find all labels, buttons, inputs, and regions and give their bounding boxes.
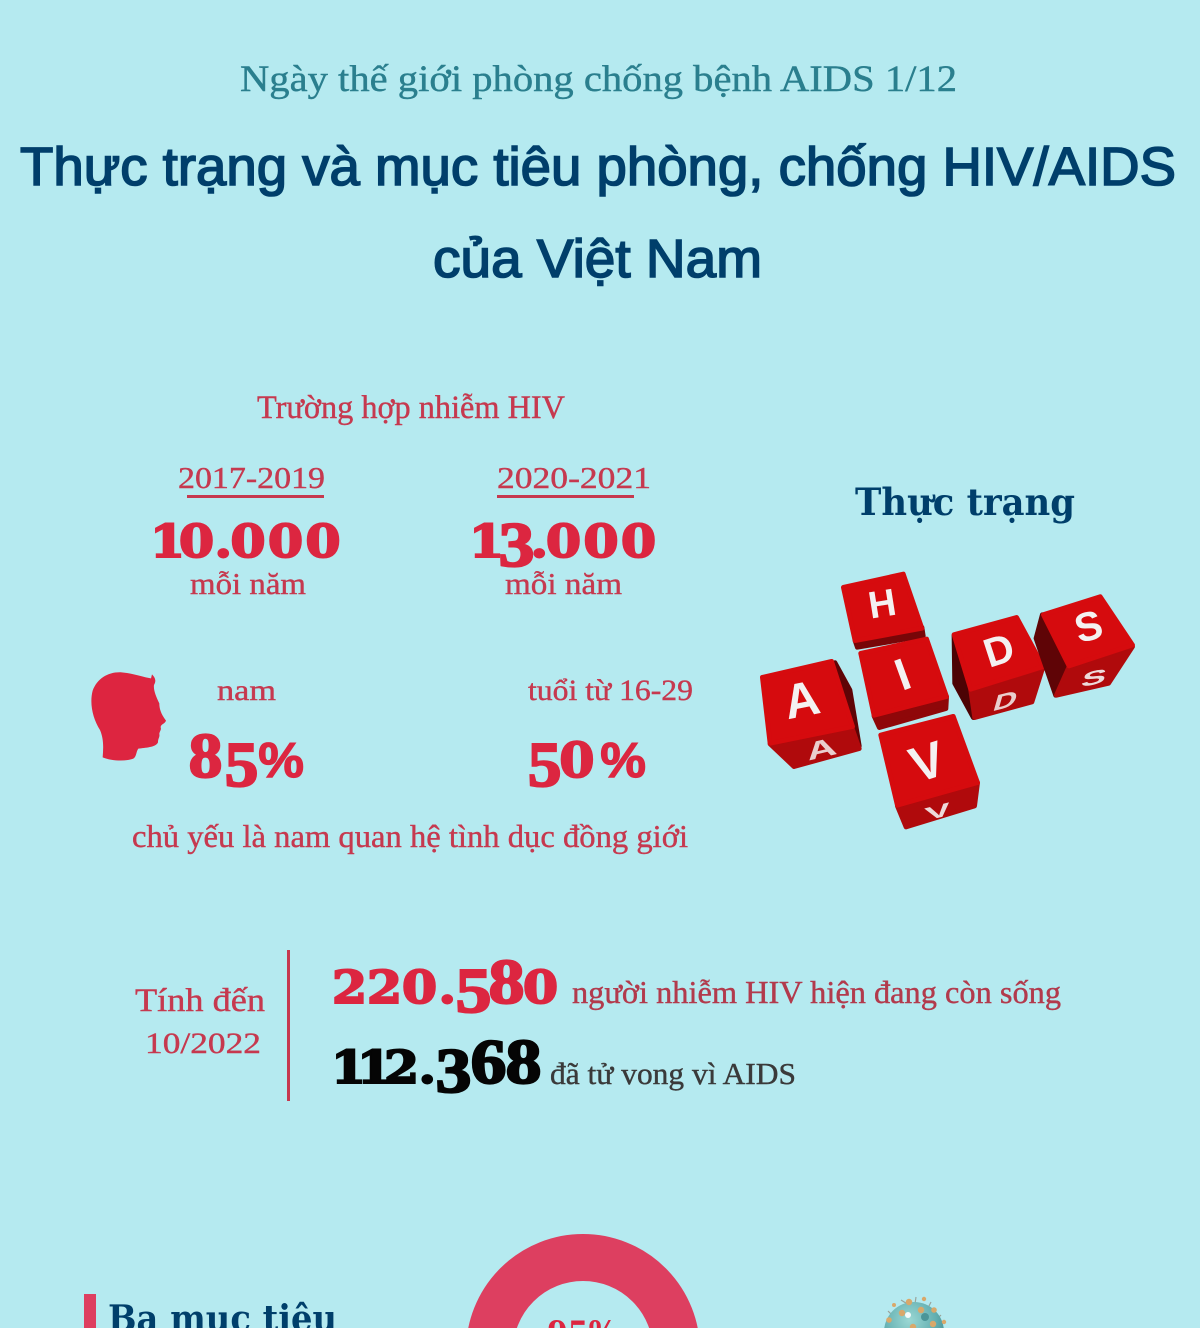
stat: 2017-2019: 1 <box>150 516 185 568</box>
stat: age 16-29 50%: tuổi từ 16-29 <box>528 674 693 707</box>
stat: AIDS deaths: đã tử vong vì AIDS <box>550 1056 796 1091</box>
stat: people living with HIV: . <box>438 962 456 1014</box>
cube I <box>861 639 947 728</box>
stat: people living with HIV: 5 <box>456 955 491 1026</box>
stat: male 85%: nam <box>217 674 276 707</box>
cube A: A <box>803 733 839 766</box>
title: của Việt Nam <box>433 229 762 289</box>
title: Thực trạng và mục tiêu phòng, chống HIV/AIDS <box>20 137 1176 197</box>
stat: age 16-29 50% <box>528 674 693 801</box>
cube H: H <box>865 582 899 628</box>
cube S <box>1036 597 1133 695</box>
stat: people living with HIV: 2 <box>367 962 402 1014</box>
stat: age 16-29 50%: % <box>600 733 646 788</box>
icon: male head silhouette <box>91 672 166 761</box>
heading: current situation: Thực trạng <box>855 480 1075 524</box>
cube H <box>843 574 923 647</box>
date label: Tính đến <box>135 983 265 1019</box>
cube V <box>881 716 978 827</box>
cube V: V <box>923 799 954 825</box>
stat: 2020-2021: 0 <box>583 516 619 568</box>
stat: people living with HIV: 0 <box>402 962 437 1014</box>
cube A: A <box>779 670 824 730</box>
stat: AIDS deaths: 2 <box>384 1042 419 1094</box>
stat: AIDS deaths: 1 <box>357 1042 392 1094</box>
title <box>20 137 1176 289</box>
cube D: D <box>978 624 1020 677</box>
stat: male 85%: 5 <box>225 730 258 801</box>
stat: age 16-29 50%: 0 <box>559 732 594 789</box>
stat: AIDS deaths: 1 <box>331 1042 366 1094</box>
cube S: S <box>1079 663 1109 692</box>
subtitle: Ngày thế giới phòng chống bệnh AIDS 1/12 <box>240 59 957 100</box>
cube D <box>954 617 1043 718</box>
cube V: V <box>903 730 952 794</box>
stat: AIDS deaths: 3 <box>436 1035 471 1106</box>
chart: 95% donut <box>490 1258 676 1328</box>
stat: AIDS deaths: 8 <box>506 1026 541 1097</box>
date label: 10/2022 <box>145 1027 261 1060</box>
stat: people living with HIV: 2 <box>332 962 367 1014</box>
stat: 2017-2019: 0 <box>179 516 214 568</box>
stat: male 85%: 8 <box>189 721 222 792</box>
stat: 2020-2021: 3 <box>499 509 534 580</box>
stat: people living with HIV: người nhiễm HIV hiện đang còn sống <box>572 974 1061 1010</box>
stat: male 85% <box>189 674 304 801</box>
illustration: HIV AIDS dice <box>762 574 1133 827</box>
heading: HIV infection cases: Trường hợp nhiễm HIV <box>257 390 565 426</box>
stat: people living with HIV <box>332 946 1061 1026</box>
stat: 2017-2019: mỗi năm <box>190 566 306 601</box>
note: transmission: chủ yếu là nam quan hệ tình dục đồng giới <box>132 818 688 854</box>
stat: 2020-2021: mỗi năm <box>505 566 622 601</box>
cube S: S <box>1069 601 1107 652</box>
stat: 2017-2019: . <box>214 516 232 568</box>
stat: 2020-2021: 2020-2021 <box>497 460 651 495</box>
stat: AIDS deaths <box>331 1026 796 1106</box>
cube A <box>762 661 859 767</box>
stat: 2020-2021: 1 <box>469 516 504 568</box>
stat: male 85%: % <box>258 733 304 788</box>
stat: age 16-29 50%: 5 <box>528 730 561 801</box>
cube D: D <box>990 686 1021 717</box>
stat: 2020-2021: . <box>531 516 548 568</box>
stat: 2017-2019 <box>150 460 341 601</box>
stat: AIDS deaths: 6 <box>471 1026 506 1097</box>
stat: people living with HIV: 8 <box>489 946 524 1017</box>
stat: AIDS deaths: . <box>419 1042 436 1094</box>
stat: 2020-2021: 0 <box>621 516 656 568</box>
stat: 2017-2019: 2017-2019 <box>178 460 325 495</box>
stat: 2017-2019: 0 <box>268 516 303 568</box>
date label <box>135 983 265 1060</box>
stat: people living with HIV: 0 <box>523 962 558 1014</box>
stat: 2020-2021 <box>469 460 656 601</box>
stat: 2017-2019: 0 <box>306 516 341 568</box>
icon: virus <box>884 1297 946 1328</box>
stat: 2020-2021: 0 <box>546 516 581 568</box>
stat: 2017-2019: 0 <box>230 516 266 568</box>
cube I: I <box>888 648 917 700</box>
